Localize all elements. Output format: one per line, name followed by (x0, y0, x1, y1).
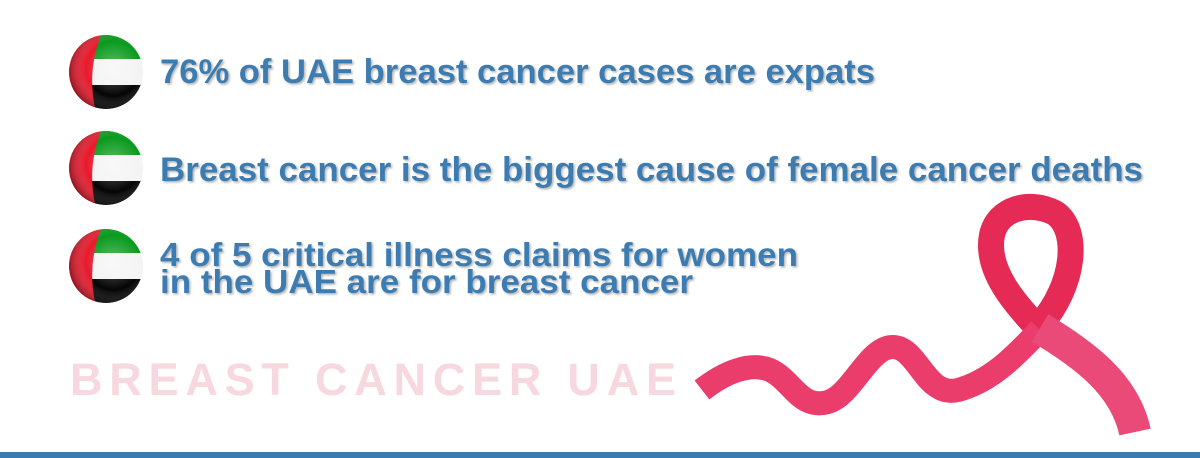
watermark title: BREAST CANCER UAE (70, 354, 676, 405)
bottom bar (0, 452, 1200, 458)
stat 2: Breast cancer is the biggest cause of female cancer deaths (160, 151, 1143, 189)
stat 1: 76% of UAE breast cancer cases are expats (160, 53, 875, 91)
icon: UAE flag 3 (66, 226, 146, 306)
icon: pink ribbon (702, 207, 1135, 432)
stat 3: 4 of 5 critical illness claims for women (160, 236, 798, 273)
icon: UAE flag 2 (66, 128, 146, 208)
stat 3: in the UAE are for breast cancer (160, 263, 693, 300)
icon: UAE flag 1 (66, 32, 146, 112)
stat 3 (160, 236, 798, 300)
